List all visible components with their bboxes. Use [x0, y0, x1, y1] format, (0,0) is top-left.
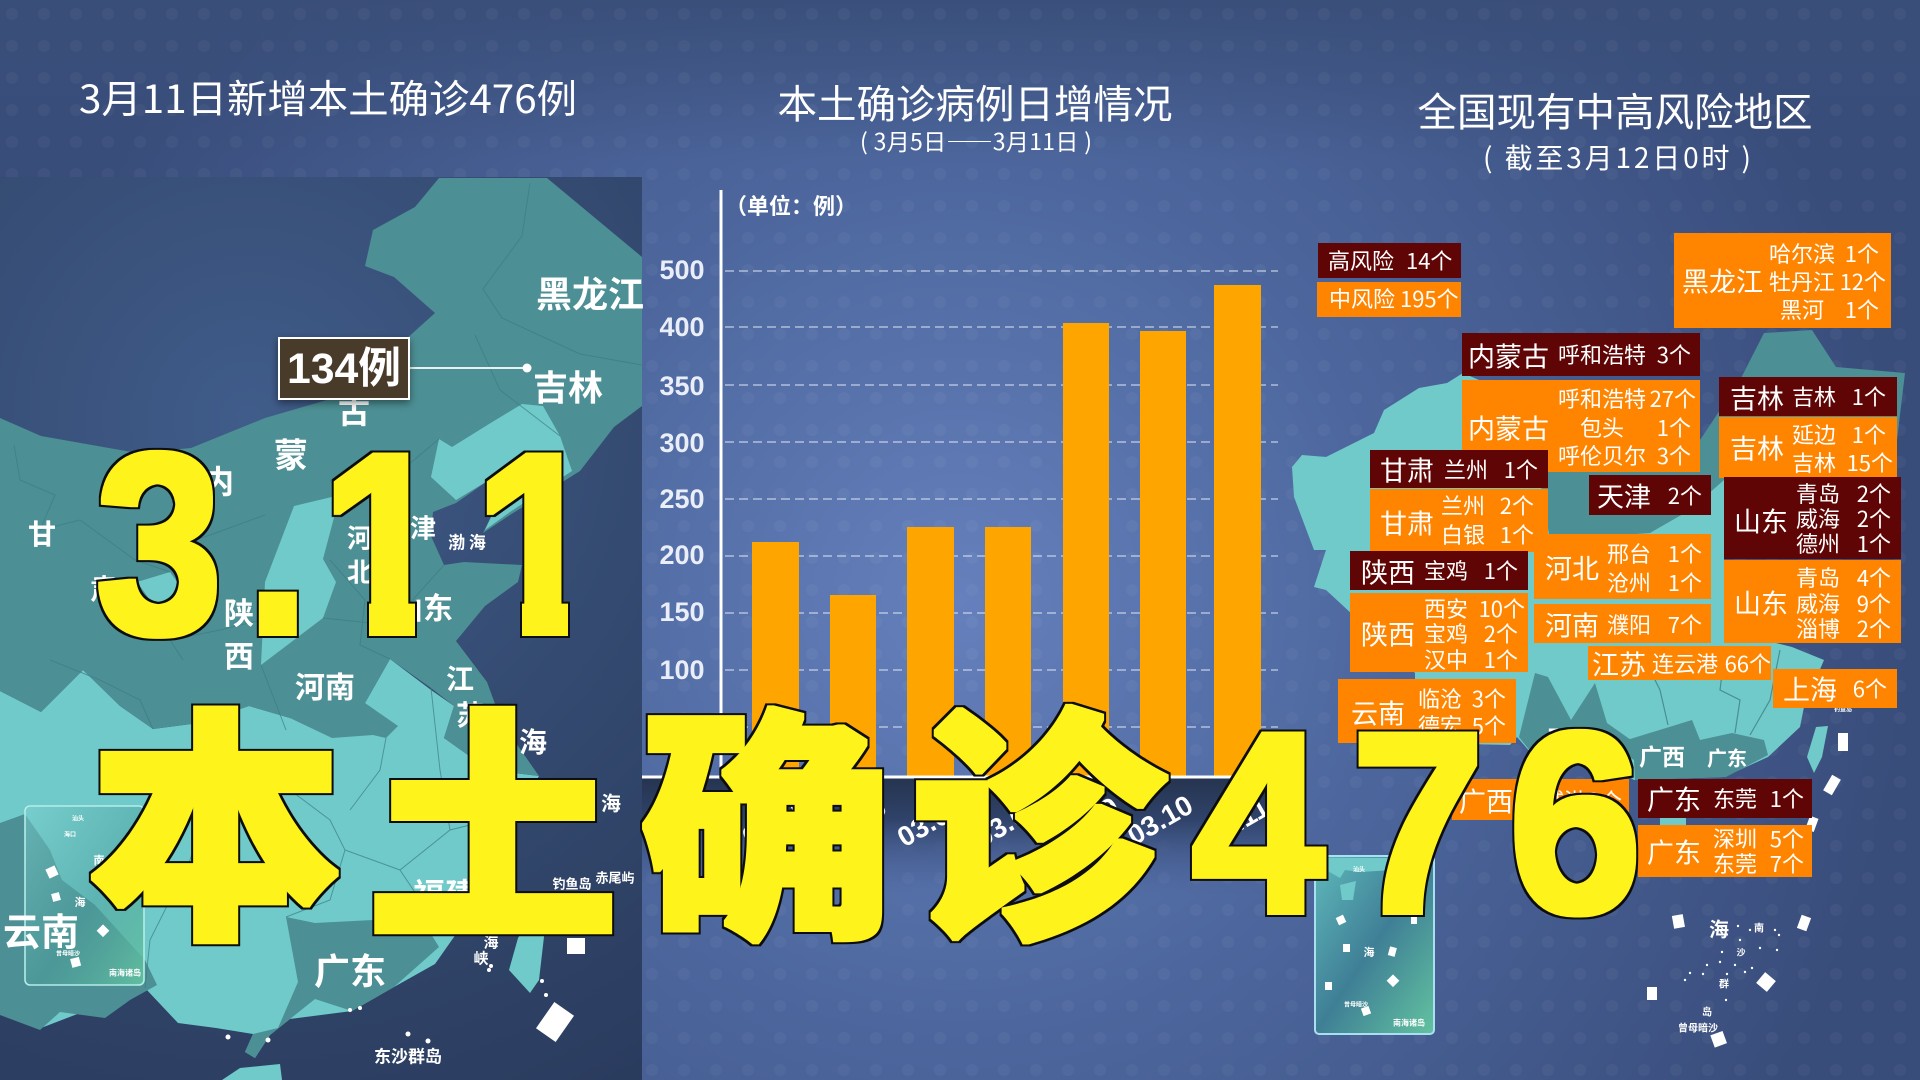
label: Inner Mongolia high: 内蒙古: [1468, 336, 1549, 374]
label: Gansu high: [1370, 450, 1548, 488]
label: Jiangsu medium: 江苏: [1592, 644, 1646, 682]
label: Shandong medium: [1724, 560, 1901, 644]
y axis labels: 200: [659, 540, 705, 570]
inset: South China Sea islands (right): [1315, 856, 1434, 1034]
label: Jilin high: 吉林: [1792, 380, 1836, 412]
map labels: left map: 广东: [314, 943, 386, 995]
label: Jilin medium: 1个: [1852, 418, 1886, 450]
label: Yunnan medium: 3个: [1472, 682, 1506, 714]
label: Gansu high: 兰州: [1444, 453, 1488, 485]
label: Heilongjiang medium: 黑河: [1780, 293, 1824, 325]
map labels: left map: 钓鱼岛: [552, 874, 592, 892]
callout: 134 cases with leader line: [279, 338, 532, 399]
subtitle: chart date range: ( 3月5日——3月11日 ): [860, 123, 1092, 157]
label: Tianjin high: [1589, 475, 1711, 515]
headline overlay: 3.11 本土确诊 476: [88, 448, 1638, 946]
label: Shaanxi medium: 汉中: [1424, 643, 1468, 675]
map labels: left map: 河: [347, 518, 373, 556]
label: Inner Mongolia medium: 呼伦贝尔: [1558, 439, 1646, 471]
label: Inner Mongolia medium: 27个: [1650, 382, 1696, 414]
label: Tianjin high: 2个: [1668, 479, 1702, 511]
headline date: 3.11: [96, 400, 601, 688]
gridlines: [725, 271, 1278, 727]
label: Guangdong medium: 广东: [1647, 832, 1701, 870]
title: right panel: 全国现有中高风险地区: [1418, 82, 1812, 138]
inset: South China Sea islands (right): 曾母暗沙: [1344, 1000, 1368, 1008]
inset: South China Sea islands (left): 海口: [64, 830, 76, 838]
label: Inner Mongolia high: [1462, 333, 1700, 376]
label: Jilin medium: 吉林: [1730, 428, 1784, 466]
label: Shandong high: 青岛: [1796, 477, 1840, 509]
map labels: left map: 蒙: [274, 428, 308, 478]
label: Gansu medium: 甘肃: [1380, 502, 1434, 542]
right map: Yunnan: [1519, 673, 1634, 760]
label: Shanghai medium: [1773, 668, 1897, 708]
y axis labels: 250: [659, 484, 705, 514]
label: Shandong medium: 9个: [1857, 587, 1891, 619]
x axis date labels: [737, 789, 1274, 853]
label: Hebei medium: 1个: [1668, 566, 1702, 598]
label: Shandong medium: 淄博: [1796, 612, 1840, 644]
label: Inner Mongolia medium: 内蒙古: [1468, 408, 1549, 446]
map labels: left map: 吉林: [533, 360, 603, 412]
label: Jilin medium: [1719, 417, 1897, 478]
map labels: left map: 江: [446, 658, 474, 698]
subtitle: right panel: ( 截至3月12日0时 ): [1483, 137, 1751, 177]
label: Guangdong medium: 7个: [1770, 847, 1804, 879]
label: Jiangsu medium: 66个: [1725, 647, 1771, 679]
right map labels: [1545, 704, 1852, 1034]
label: Henan medium: [1534, 604, 1711, 644]
label: Heilongjiang medium: 1个: [1845, 293, 1879, 325]
y axis labels: [659, 255, 709, 742]
label: Shandong high: 1个: [1857, 527, 1891, 559]
map labels: left map: [28, 266, 644, 1068]
label: Jilin high: 吉林: [1730, 378, 1784, 416]
text: Yunnan label: 云南: [3, 902, 79, 956]
map labels: left map: 陕: [224, 589, 254, 633]
inset: South China Sea islands (left): 南海诸岛: [109, 968, 141, 978]
label: Hebei medium: 邢台: [1607, 537, 1651, 569]
label: Gansu medium: 2个: [1500, 489, 1534, 521]
label: Guangdong medium: 东莞: [1713, 847, 1757, 879]
map labels: left map: 海: [483, 932, 499, 952]
label: Hebei medium: 沧州: [1607, 566, 1651, 598]
label: Guangxi medium: 3个: [1588, 784, 1622, 816]
map: Ningxia: [137, 572, 183, 620]
map: southern provinces: [0, 659, 539, 1058]
label: Gansu high: 1个: [1504, 453, 1538, 485]
label: Guangdong medium: [1638, 822, 1812, 879]
label: Yunnan medium: 德宏: [1418, 709, 1462, 741]
label: Shaanxi high: 1个: [1484, 554, 1518, 586]
label: Shaanxi medium: 宝鸡: [1424, 617, 1468, 649]
label: Gansu medium: 白银: [1441, 518, 1485, 550]
x axis date labels: 03.06: [815, 791, 891, 853]
callout: 134 cases with leader line: 134例: [287, 345, 401, 393]
inset: South China Sea islands (left): 汕头: [72, 814, 84, 822]
label: Hebei medium: [1534, 534, 1711, 599]
label: Shaanxi medium: 2个: [1484, 617, 1518, 649]
map labels: left map: 津: [410, 508, 436, 546]
panel: left map of new cases: [0, 69, 644, 1080]
label: Inner Mongolia medium: 1个: [1657, 411, 1691, 443]
map labels: left map: 内: [202, 457, 234, 503]
label: Inner Mongolia medium: 呼和浩特: [1558, 382, 1646, 414]
inset: South China Sea islands (left): 曾母暗沙: [56, 948, 80, 958]
label: Shaanxi high: 陕西: [1361, 552, 1415, 590]
map labels: left map: 古: [338, 387, 370, 433]
map labels: left map: 西: [224, 632, 254, 676]
label: Gansu medium: 1个: [1500, 518, 1534, 550]
label: Shaanxi medium: 1个: [1484, 643, 1518, 675]
islands: nine-dash marks on right map: [1647, 733, 1848, 1048]
label: Shandong medium: 威海: [1796, 587, 1840, 619]
right map labels: 沙: [1736, 946, 1746, 958]
label: Yunnan medium: [1338, 679, 1516, 743]
label: Heilongjiang medium: 牡丹江: [1769, 265, 1835, 297]
left map sea: [0, 177, 642, 1080]
y axis labels: 300: [659, 428, 705, 458]
map labels: left map: 海: [519, 721, 547, 761]
label: Inner Mongolia high: 呼和浩特: [1558, 338, 1646, 370]
label: Jilin high: [1719, 377, 1897, 416]
legend: high risk total: 14个: [1406, 244, 1452, 276]
right map labels: 广西: [1639, 738, 1685, 772]
label: Yunnan medium: 临沧: [1418, 682, 1462, 714]
right map: Taiwan: [1807, 726, 1828, 773]
label: Shandong high: 德州: [1796, 527, 1840, 559]
label: Jilin high: 1个: [1852, 380, 1886, 412]
map labels: left map: 苏: [456, 694, 484, 734]
map: Yunnan: [0, 814, 157, 1030]
islands: nine-dash marks on left map: [226, 938, 585, 1044]
y axis labels: 400: [659, 312, 705, 342]
label: Shandong medium: 2个: [1857, 612, 1891, 644]
label: Heilongjiang medium: 1个: [1845, 237, 1879, 269]
label: Guangdong medium: 5个: [1770, 822, 1804, 854]
inset: South China Sea islands (right): 南海诸岛: [1393, 1018, 1425, 1028]
label: Inner Mongolia medium: 3个: [1657, 439, 1691, 471]
label: Shandong high: 山东: [1734, 500, 1788, 540]
right map labels: 云南: [1545, 720, 1593, 754]
right map borders: [1640, 650, 1780, 735]
map labels: left map: 海: [601, 788, 621, 816]
label: Guangxi medium: 防城港: [1520, 784, 1586, 816]
label: Guangxi medium: 广西: [1459, 780, 1513, 820]
inset: South China Sea islands (right): 汕头: [1353, 864, 1365, 874]
legend: medium risk total: [1317, 282, 1461, 317]
right map: Hainan: [1660, 815, 1686, 826]
inset: South China Sea islands (left): [25, 806, 144, 985]
bars: [752, 285, 1261, 777]
label: Gansu high: 甘肃: [1380, 450, 1434, 488]
label: Gansu medium: 兰州: [1441, 489, 1485, 521]
label: Inner Mongolia medium: 包头: [1580, 411, 1624, 443]
label: Jilin medium: 15个: [1847, 446, 1893, 478]
right map labels: 曾母暗沙: [1678, 1020, 1718, 1034]
title: chart: 本土确诊病例日增情况: [778, 74, 1172, 130]
x axis date labels: 03.11: [1200, 791, 1274, 853]
inset: South China Sea islands (left): 海: [74, 894, 86, 910]
label: Heilongjiang medium: [1674, 233, 1891, 328]
y axis labels: 350: [659, 371, 705, 401]
panel: medium and high risk areas: [1292, 82, 1905, 1048]
label: Guangdong high: 东莞: [1713, 782, 1757, 814]
label: Shaanxi medium: 西安: [1424, 592, 1468, 624]
label: Shandong high: 2个: [1857, 477, 1891, 509]
map labels: left map: 山东: [393, 584, 453, 628]
label: Guangdong high: 广东: [1647, 778, 1701, 818]
label: Shanghai medium: 上海: [1783, 668, 1837, 708]
map labels: left map: 渤 海: [448, 528, 486, 554]
right map: base: [1292, 373, 1824, 780]
right map: north: [1470, 330, 1905, 540]
label: Inner Mongolia high: 3个: [1657, 338, 1691, 370]
unit label: （单位：例）: [725, 189, 857, 221]
title: left panel: 3月11日新增本土确诊476例: [79, 69, 577, 125]
right map labels: 广东: [1707, 742, 1747, 772]
label: Jilin medium: 延边: [1792, 418, 1836, 450]
label: Heilongjiang medium: 哈尔滨: [1769, 237, 1835, 269]
label: Jilin medium: 吉林: [1792, 446, 1836, 478]
map: Hainan: [222, 1064, 282, 1080]
label: Shandong medium: 山东: [1734, 582, 1788, 622]
label: Shaanxi medium: 10个: [1479, 592, 1525, 624]
map labels: left map: 肃: [90, 568, 118, 608]
legend: medium risk total: 195个: [1400, 282, 1459, 314]
label: Yunnan medium: 5个: [1472, 709, 1506, 741]
legend: medium risk total: 中风险: [1329, 282, 1395, 314]
label: Shandong high: [1724, 477, 1901, 559]
label: Jiangsu medium: [1588, 644, 1771, 682]
right map labels: 南: [1754, 920, 1764, 934]
chart axes: [642, 190, 1280, 777]
label: Shanghai medium: 6个: [1853, 672, 1887, 704]
map: Liaoning: [431, 404, 572, 530]
y axis labels: 150: [659, 597, 705, 627]
label: Shaanxi high: 宝鸡: [1424, 554, 1468, 586]
label: Hebei medium: 河北: [1545, 548, 1599, 586]
map labels: left map: 黑龙江: [536, 266, 644, 318]
label: Hebei medium: 1个: [1668, 537, 1702, 569]
label: Gansu medium: [1370, 489, 1548, 552]
legend: high risk total: 高风险: [1328, 244, 1394, 276]
y axis labels: 50: [679, 712, 709, 742]
map: Taiwan: [509, 928, 545, 993]
right map: Hebei coast light: [1680, 500, 1724, 540]
label: Henan medium: 河南: [1545, 604, 1599, 644]
x axis date labels: 03.05: [737, 791, 813, 853]
map labels: left map: 北: [347, 552, 373, 590]
map: northern provinces: [0, 178, 642, 776]
map: Guangdong: [245, 908, 439, 1058]
map labels: left map: 甘: [28, 513, 56, 553]
right map: Guangxi Guangdong: [1627, 720, 1768, 780]
label: Jiangsu medium: 连云港: [1652, 647, 1718, 679]
right map labels: 海: [1709, 914, 1729, 942]
label: Shaanxi high: [1350, 551, 1528, 590]
label: Yunnan medium: 云南: [1351, 692, 1405, 732]
label: Guangdong high: 1个: [1770, 782, 1804, 814]
label: Shandong high: 2个: [1857, 502, 1891, 534]
label: Shandong medium: 青岛: [1796, 561, 1840, 593]
map labels: left map: 峡: [473, 948, 489, 968]
legend: high risk total: [1318, 243, 1461, 278]
headline words: 本土确诊: [90, 634, 1166, 989]
label: Shandong medium: 4个: [1857, 561, 1891, 593]
band below chart baseline: [642, 777, 1302, 897]
label: Guangdong medium: 深圳: [1713, 822, 1757, 854]
inset: South China Sea islands (right): 海: [1364, 944, 1374, 960]
label: Henan medium: 濮阳: [1607, 608, 1651, 640]
map labels: left map: 河南: [295, 663, 355, 707]
x axis date labels: 03.09: [1048, 791, 1124, 853]
label: Henan medium: 7个: [1668, 608, 1702, 640]
label: Shandong high: 威海: [1796, 502, 1840, 534]
right map labels: 岛: [1702, 1004, 1712, 1018]
label: Inner Mongolia medium: [1462, 380, 1700, 472]
label: Shaanxi medium: [1350, 592, 1528, 675]
right map labels: 钓鱼岛: [1834, 704, 1852, 714]
label: Tianjin high: 天津: [1597, 476, 1651, 514]
label: Heilongjiang medium: 12个: [1840, 265, 1886, 297]
map labels: left map: 福建: [413, 870, 477, 916]
label: Shaanxi medium: 陕西: [1361, 614, 1415, 652]
map labels: left map: 东沙群岛: [374, 1042, 442, 1068]
province borders: [14, 183, 642, 988]
map: Shanxi: [261, 495, 340, 665]
y axis labels: 100: [659, 655, 705, 685]
headline number: 476: [1191, 678, 1642, 967]
x axis date labels: 03.10: [1122, 789, 1198, 851]
label: Guangdong high: [1638, 778, 1812, 818]
panel: daily new cases bar chart: [642, 74, 1302, 897]
right map labels: 群: [1719, 976, 1729, 990]
x axis date labels: 03.07: [892, 791, 968, 853]
label: Guangxi medium: [1452, 779, 1629, 820]
y axis labels: 500: [659, 255, 705, 285]
label: Heilongjiang medium: 黑龙江: [1682, 260, 1763, 300]
map labels: left map: 赤尾屿: [595, 868, 635, 886]
x axis date labels: 03.08: [970, 791, 1046, 853]
inset: South China Sea islands (left): 南: [94, 852, 104, 868]
